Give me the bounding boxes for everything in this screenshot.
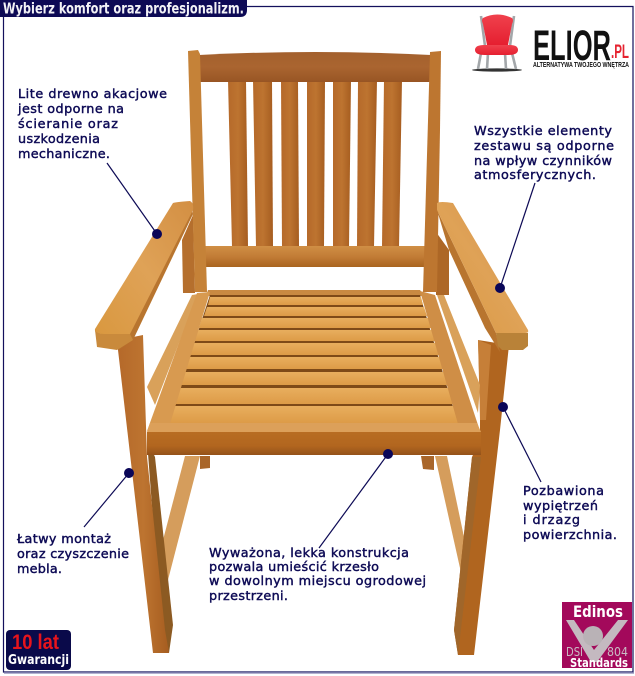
connector line and dot — [498, 402, 541, 482]
front right leg — [454, 340, 509, 655]
left back post — [188, 50, 207, 292]
connector line and dot — [495, 183, 535, 293]
seat back bar — [206, 290, 424, 296]
right armrest — [437, 202, 528, 352]
callout text: Wyważona, lekka konstrukcja — [209, 546, 409, 561]
seat frame right side — [420, 291, 480, 431]
callout text: Wszystkie elementy — [474, 124, 612, 139]
seat slat gaps — [168, 295, 458, 424]
icon: grey V mark — [566, 620, 628, 662]
callout: easy assembly — [16, 468, 134, 577]
seat slats — [168, 297, 459, 423]
rear legs and side stretchers — [163, 456, 464, 580]
callout text: pozwala umieścić krzesło — [209, 560, 379, 575]
badge: 10 years warranty — [6, 630, 71, 670]
backrest — [188, 50, 441, 292]
badge label: Gwarancji — [8, 653, 69, 668]
backrest lower rail — [205, 246, 426, 267]
back post supports under armrests — [182, 215, 195, 293]
backrest slats — [228, 80, 402, 247]
icon: grey circle — [583, 626, 603, 646]
icon: red chair — [472, 14, 522, 72]
callout text: atmosferycznych. — [474, 168, 596, 183]
badge value: 10 lat — [12, 631, 59, 654]
callout text: uszkodzenia — [18, 132, 100, 147]
right back post — [423, 51, 441, 292]
callout text: Lite drewno akacjowe — [18, 87, 167, 102]
seat front bar top — [147, 423, 481, 432]
seat — [147, 290, 481, 455]
logo: Elior — [472, 14, 629, 72]
seat frame left side — [147, 292, 210, 431]
callout: solid acacia wood — [17, 87, 167, 239]
connector line and dot — [107, 163, 162, 239]
callout text: ścieranie oraz — [18, 117, 118, 132]
badge 804 label: 804 — [607, 645, 628, 659]
callout text: zestawu są odporne — [474, 139, 614, 154]
callout text: w dowolnym miejscu ogrodowej — [209, 574, 426, 589]
badge: Edinos standards — [562, 602, 632, 670]
front left leg — [118, 335, 173, 653]
callout text: mebla. — [17, 562, 62, 577]
callout text: Łatwy montaż — [16, 532, 111, 547]
left armrest — [95, 201, 193, 350]
callout text: i drzazg — [523, 513, 580, 528]
callout text: wypiętrzeń — [523, 499, 598, 514]
callout: weather resistance — [474, 124, 614, 293]
callout text: jest odporne na — [17, 102, 124, 117]
connector line and dot — [319, 449, 393, 548]
seat front apron — [147, 432, 481, 455]
badge title: Edinos — [573, 602, 623, 621]
badge DSI label: DSI — [566, 645, 583, 659]
callout: smooth surface — [498, 402, 617, 543]
callout: light construction — [209, 449, 426, 604]
seat side rails — [147, 294, 198, 405]
callout text: przestrzeni. — [209, 589, 288, 604]
connector line and dot — [84, 468, 134, 527]
heading banner: Wybierz komfort oraz profesjonalizm. — [3, 0, 244, 18]
callout text: na wpływ czynników — [474, 154, 612, 169]
callout text: mechaniczne. — [18, 147, 110, 162]
backrest top rail — [199, 52, 431, 82]
chair illustration — [95, 50, 528, 655]
callout text: oraz czyszczenie — [17, 547, 129, 562]
callout text: powierzchnia. — [523, 528, 617, 543]
callout text: Pozbawiona — [523, 484, 604, 499]
